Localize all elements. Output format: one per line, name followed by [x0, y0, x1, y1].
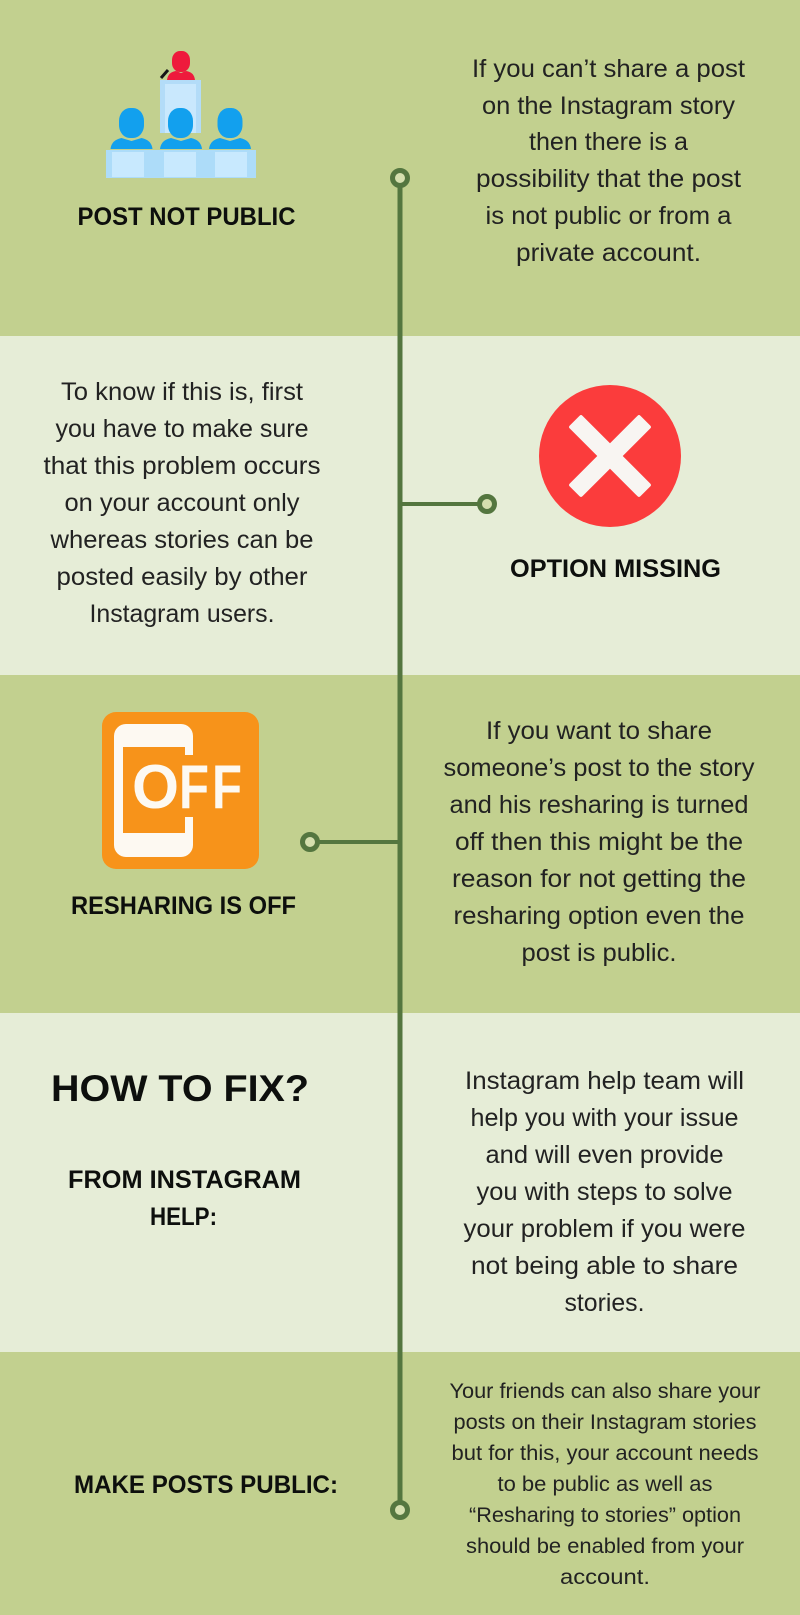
text block: make posts public description: should be enabled from your: [466, 1535, 744, 1558]
text block: instagram help description: and will even provide: [486, 1141, 724, 1169]
icon: red cross: [539, 385, 681, 527]
text block: resharing description: someone’s post to the story: [444, 754, 755, 782]
text block: post not public description: possibility that the post: [476, 165, 741, 193]
text block: resharing description: off then this might be the: [455, 828, 743, 856]
heading: from instagram help: [68, 1166, 301, 1231]
icon: phone off: F: [212, 753, 242, 822]
text block: instagram help description: help you with your issue: [470, 1104, 738, 1132]
text block: instagram help description: Instagram help team will: [465, 1067, 744, 1095]
heading: from instagram help: HELP:: [150, 1203, 217, 1231]
text block: option missing description: whereas stories can be: [49, 526, 314, 554]
text block: option missing description: To know if this is, first: [61, 378, 303, 406]
text block: option missing description: that this problem occurs: [44, 452, 320, 480]
text block: option missing description: [44, 378, 320, 628]
text block: make posts public description: Your friends can also share your: [450, 1380, 760, 1403]
panel: post not public band: [0, 0, 800, 336]
panel: make posts public band: [0, 1352, 800, 1615]
text block: resharing description: reason for not getting the: [452, 865, 746, 893]
icon: phone off: O: [132, 753, 179, 822]
text block: post not public description: then there is a: [529, 128, 688, 156]
icon: phone off: F: [179, 753, 209, 822]
text block: instagram help description: stories.: [564, 1289, 644, 1317]
text block: post not public description: private account.: [516, 239, 701, 267]
heading: how to fix: HOW TO FIX?: [51, 1068, 309, 1109]
text block: make posts public description: [450, 1380, 760, 1589]
text block: resharing description: [444, 717, 755, 967]
icon: phone off: [102, 712, 259, 869]
panel: resharing is off band: [0, 675, 800, 1013]
text block: resharing description: If you want to share: [486, 717, 712, 745]
text block: post not public description: [472, 55, 745, 267]
text block: make posts public description: “Resharing to stories” option: [469, 1504, 741, 1527]
text block: option missing description: on your account only: [64, 489, 300, 517]
text block: post not public description: If you can’t share a post: [472, 55, 745, 83]
heading: post not public: POST NOT PUBLIC: [78, 203, 296, 231]
text block: post not public description: is not public or from a: [486, 202, 732, 230]
panel: option missing band: [0, 336, 800, 675]
text block: make posts public description: to be public as well as: [498, 1473, 712, 1496]
timeline: vertical line with branches and nodes: [302, 170, 494, 1518]
icon: presenter and audience: [106, 51, 256, 178]
text block: make posts public description: account.: [560, 1566, 650, 1589]
text block: option missing description: Instagram users.: [90, 600, 274, 628]
text block: instagram help description: [464, 1067, 746, 1317]
heading: make posts public: MAKE POSTS PUBLIC:: [74, 1471, 338, 1499]
text block: make posts public description: but for this, your account needs: [452, 1442, 758, 1465]
text block: resharing description: resharing option even the: [454, 902, 744, 930]
heading: from instagram help: FROM INSTAGRAM: [68, 1166, 301, 1194]
text block: option missing description: posted easily by other: [56, 563, 308, 591]
text block: post not public description: on the Instagram story: [482, 92, 736, 120]
text block: resharing description: post is public.: [522, 939, 676, 967]
text block: instagram help description: not being able to share: [471, 1252, 738, 1280]
text block: resharing description: and his resharing is turned: [450, 791, 748, 819]
heading: option missing: OPTION MISSING: [510, 555, 721, 583]
heading: resharing is off: RESHARING IS OFF: [71, 892, 296, 920]
panel: how to fix band: [0, 1013, 800, 1352]
text block: option missing description: you have to make sure: [56, 415, 308, 443]
text block: instagram help description: you with steps to solve: [476, 1178, 732, 1206]
text block: instagram help description: your problem if you were: [464, 1215, 746, 1243]
text block: make posts public description: posts on their Instagram stories: [454, 1411, 756, 1434]
